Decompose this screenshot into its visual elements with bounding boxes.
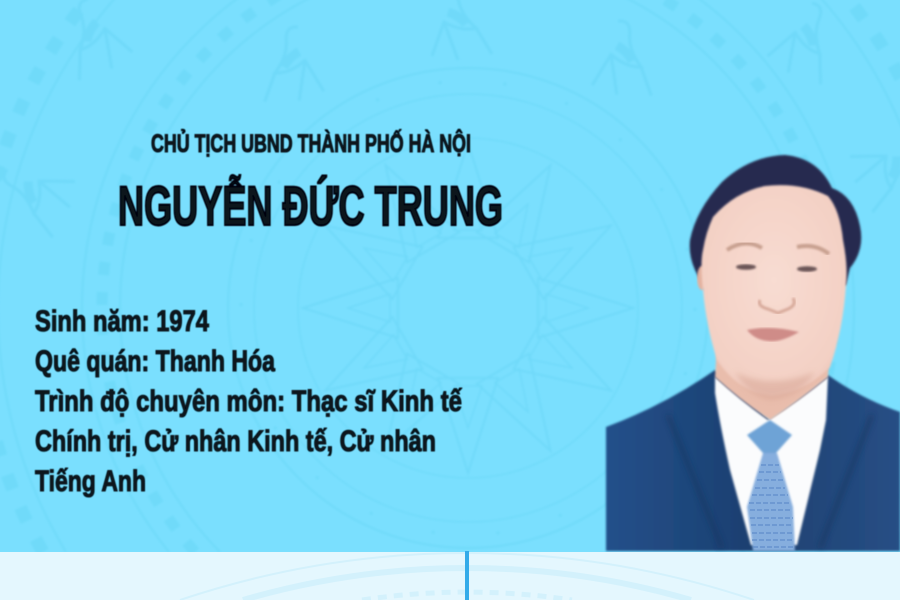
tie [747,420,795,551]
ear [697,266,707,290]
heading: position: CHỦ TỊCH UBND THÀNH PHỐ HÀ NỘI [151,128,471,158]
bottom panel arcs [180,553,754,600]
biography text block: Quê quán: Thanh Hóa [35,345,275,378]
tie pattern [749,465,794,547]
face [702,185,847,396]
mouth [747,328,799,341]
biography text block: Tiếng Anh [35,465,146,498]
nose [759,298,794,313]
lapel shading [668,415,872,548]
vertical divider [465,551,469,600]
biography text block: Chính trị, Cử nhân Kinh tế, Cử nhân [35,425,436,458]
portrait photo [606,155,900,551]
shirt and collar [715,377,828,545]
biography text block: Trình độ chuyên môn: Thạc sĩ Kinh tế [35,385,462,418]
eyebrows [727,243,829,254]
bottom panel [0,551,900,600]
hair [690,155,861,300]
heading: name: NGUYỄN ĐỨC TRUNG [118,174,503,237]
suit jacket [606,370,900,551]
eyes [736,264,817,272]
biography text block [35,305,462,498]
chin shadow [735,372,815,400]
neck [715,345,830,420]
biography text block: Sinh năm: 1974 [35,305,209,338]
